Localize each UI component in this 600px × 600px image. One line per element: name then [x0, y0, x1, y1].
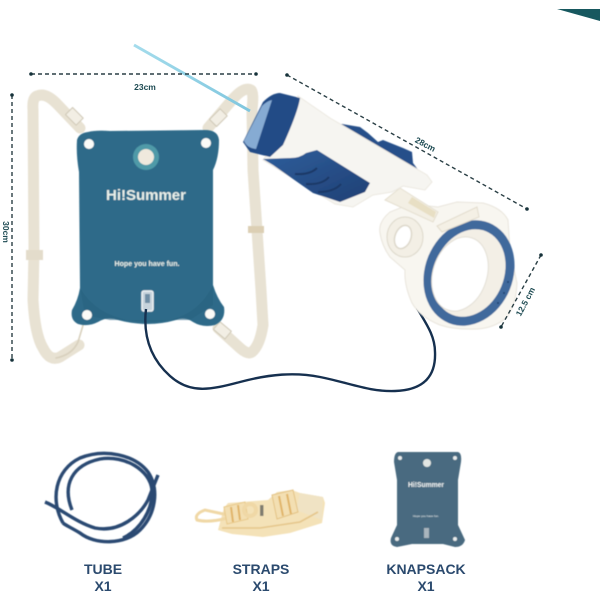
bag valve [133, 144, 159, 170]
label: tube [84, 561, 122, 594]
dimension: 28cm [285, 73, 529, 211]
accessory: knapsack: Hi!Summer [408, 482, 444, 489]
knapsack bag [72, 130, 224, 326]
label: tube: TUBE [84, 561, 122, 577]
dimension: 23cm [29, 72, 258, 92]
grip ridges [295, 168, 341, 192]
label: straps: X1 [252, 578, 270, 594]
bag logo: Hi!Summer [106, 187, 186, 204]
bag tagline: Hope you have fun. [114, 259, 180, 268]
accessory: tube coil [45, 453, 158, 542]
accessory: knapsack [391, 452, 465, 547]
backpack straps [26, 89, 264, 358]
dimension: 30cm [1, 93, 14, 362]
gun white body [263, 96, 432, 207]
label: straps: STRAPS [233, 561, 289, 577]
gun rear ring [380, 202, 530, 340]
label: knapsack: KNAPSACK [386, 561, 466, 577]
eyelets [82, 138, 215, 320]
water jet [134, 45, 250, 111]
dimension: 30cm: 30cm [1, 221, 11, 243]
water gun [243, 93, 530, 340]
water tube [145, 308, 435, 391]
dimension: 12.5 cm: 12.5 cm [514, 285, 537, 318]
corner accent [557, 9, 600, 21]
dimension: 28cm: 28cm [413, 135, 438, 154]
label: tube: X1 [94, 578, 112, 594]
label: knapsack [386, 561, 466, 594]
accessory: straps [196, 490, 325, 537]
gun connector [385, 188, 438, 222]
gun grip [263, 150, 370, 202]
accessory: knapsack: Hope you have fun. [413, 514, 439, 518]
gun top controls [335, 124, 422, 175]
label: straps [233, 561, 289, 594]
label: knapsack: X1 [417, 578, 435, 594]
dimension: 12.5 cm [499, 253, 543, 329]
bag connector [142, 291, 153, 311]
gun head [243, 93, 300, 157]
dimension: 23cm: 23cm [134, 82, 156, 92]
